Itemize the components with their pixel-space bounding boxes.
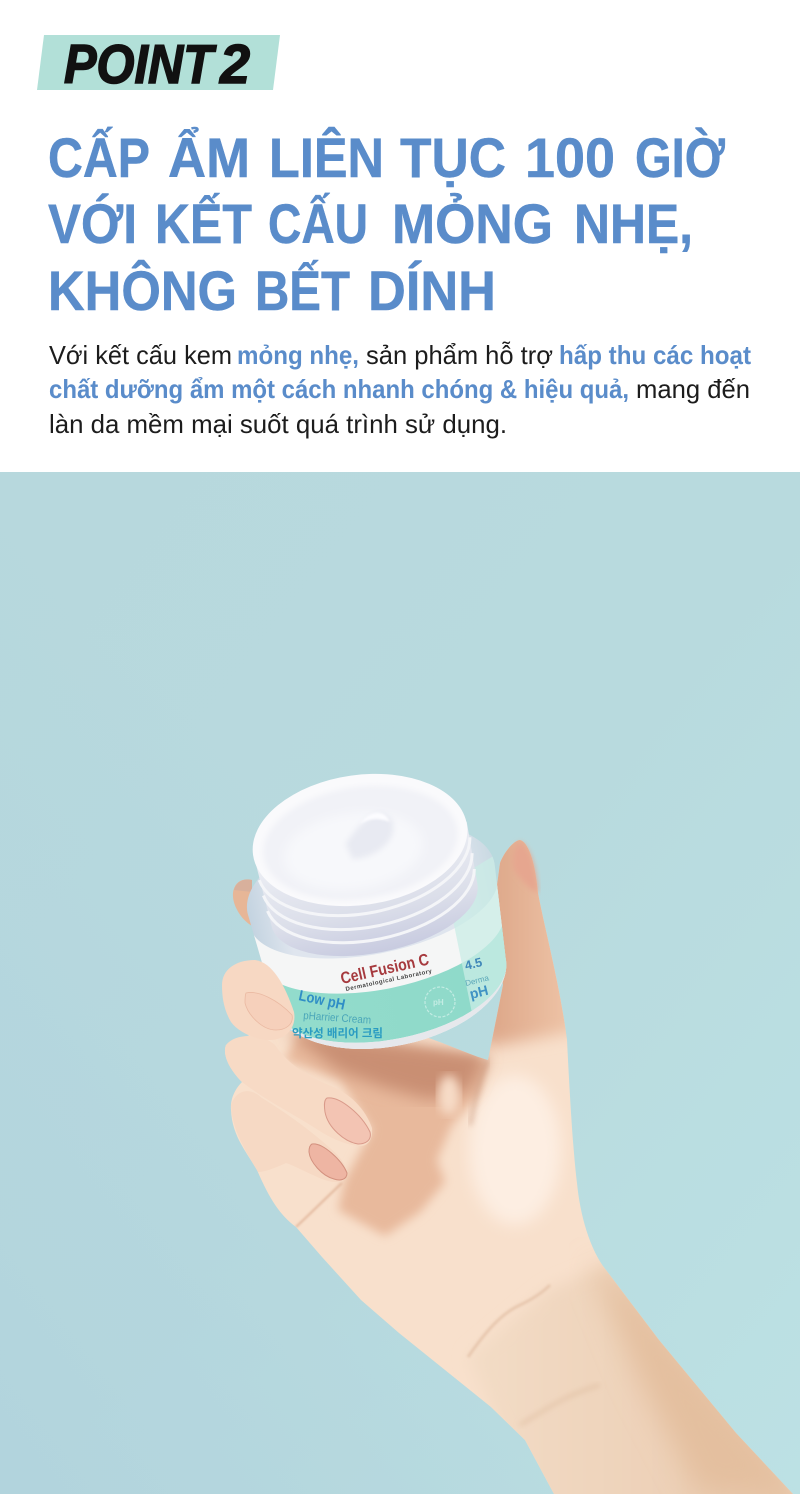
- cream surface: [244, 761, 476, 919]
- fingertip nail upper right: [513, 842, 538, 893]
- nail 2: [309, 1144, 347, 1180]
- title: [48, 126, 725, 322]
- thumb holding jar: [222, 960, 294, 1040]
- title: KHÔNG: [48, 259, 237, 322]
- lower finger 2: [231, 1091, 347, 1182]
- body text: sản phẩm hỗ trợ: [366, 340, 553, 370]
- title: KẾT: [155, 192, 252, 255]
- title: ẨM: [168, 126, 250, 189]
- glass base: [291, 974, 506, 1049]
- title: 100: [525, 126, 615, 189]
- thumb nail: [245, 992, 292, 1030]
- label: pH: pH: [468, 982, 490, 1002]
- title: BẾT: [255, 259, 350, 322]
- inner cylinder: [256, 822, 489, 973]
- badge: POINT 2: [37, 33, 280, 95]
- label: Dermatological Laboratory: Dermatological Laboratory: [345, 969, 433, 993]
- body text: Với kết cấu kem: [49, 340, 232, 370]
- jar glass body: [235, 802, 526, 1070]
- body text: mang đến: [636, 374, 750, 404]
- body text: hấp thu các hoạt: [559, 340, 751, 370]
- jar: [246, 774, 506, 1049]
- label: Derma: Derma: [464, 973, 490, 988]
- title: CẤP: [48, 126, 150, 189]
- palm shadow: [285, 1030, 488, 1236]
- badge: POINT 2: POINT: [64, 33, 217, 95]
- stamp: pH circle: [425, 987, 455, 1017]
- title: MỎNG: [392, 192, 553, 255]
- photo background: [0, 472, 800, 1494]
- title: DÍNH: [368, 259, 496, 322]
- nail 1: [324, 1098, 370, 1144]
- label: Low pH: Low pH: [297, 987, 347, 1014]
- title: CẤU: [268, 192, 368, 255]
- label teal band: [282, 926, 506, 1043]
- body text: [49, 340, 751, 439]
- body text: mỏng nhẹ,: [237, 340, 359, 370]
- title: TỤC: [400, 126, 506, 189]
- wrist crease: [468, 1285, 550, 1357]
- lower finger 1: [225, 1036, 372, 1146]
- label: 4.5: 4.5: [463, 955, 484, 973]
- finger upper right: [490, 840, 566, 1054]
- palm crease: [296, 1183, 342, 1227]
- label: Korean product name: 약산성 배리어 크림: [292, 1026, 383, 1040]
- title: VỚI: [48, 192, 137, 255]
- label: pHarrier Cream: pHarrier Cream: [303, 1010, 371, 1027]
- hand and arm: [225, 820, 800, 1494]
- body text: làn da mềm mại suốt quá trình sử dụng.: [49, 409, 507, 439]
- title: GIỜ: [635, 126, 725, 189]
- forearm shading: [498, 1270, 793, 1494]
- stamp: pH circle: pH: [433, 998, 444, 1007]
- label: Cell Fusion C: Cell Fusion C: [339, 951, 431, 988]
- badge: POINT 2: 2: [219, 33, 250, 95]
- label pale side strip: [454, 857, 506, 1011]
- neck threads: [259, 837, 486, 960]
- title: LIÊN: [269, 126, 384, 189]
- label white band: [254, 886, 506, 1049]
- body text: chất dưỡng ẩm một cách nhanh chóng & hiệu quả,: [49, 374, 629, 404]
- finger behind jar left: [233, 879, 252, 926]
- palm thumb-mound highlight: [469, 1075, 561, 1225]
- title: NHẸ,: [574, 192, 693, 255]
